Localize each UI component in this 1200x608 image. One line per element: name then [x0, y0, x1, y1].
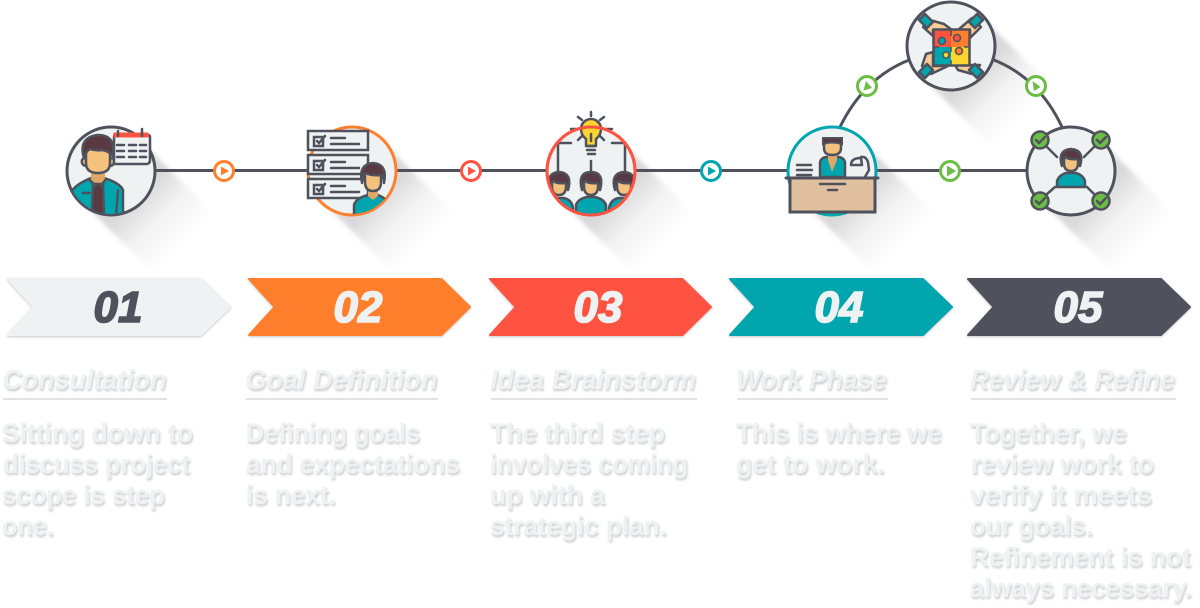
chevron 05: 05: [1054, 283, 1103, 332]
long shadows behind icons: [81, 16, 1171, 271]
text block: step 2: and expectations: [246, 449, 460, 479]
lightbulb: [571, 112, 612, 154]
text block: step 5: Refinement is not: [970, 542, 1191, 572]
heading: Idea Brainstorm: Idea Brainstorm: [490, 364, 696, 395]
heading: Review & Refine: Review & Refine: [970, 364, 1175, 395]
puzzle: [934, 30, 970, 66]
icon: goal checklist and person: [308, 127, 396, 216]
text block: step 4: [736, 418, 942, 479]
chevron 03: [490, 279, 711, 335]
text block: step 3: strategic plan.: [490, 511, 667, 541]
text block: step 3: involves coming: [490, 449, 688, 479]
text block: step 1: discuss project: [3, 449, 190, 479]
desk lamp: [851, 157, 869, 177]
icon: work phase desk: [786, 127, 878, 215]
chevron 05: [968, 279, 1190, 335]
text block: step 5: review work to: [971, 449, 1154, 479]
arrow: puzzle to step 5: [1026, 76, 1046, 96]
icon: puzzle hands: [907, 2, 995, 90]
person: [1057, 149, 1085, 187]
text block: step 3: up with a: [490, 480, 606, 510]
text block: step 1: scope is step: [2, 480, 165, 510]
icon: consultation person with calendar: [67, 127, 155, 216]
text block: step 2: [246, 418, 460, 510]
arrow: step 2 to 3: [462, 162, 480, 180]
arrow: step 1 to 2: [214, 162, 234, 180]
icon: review with checks: [1027, 127, 1115, 215]
desk: [786, 178, 878, 212]
icon: idea brainstorm team: [545, 112, 638, 216]
chevron 04: [730, 279, 952, 335]
text block: step 1: one.: [2, 511, 54, 541]
heading: Work Phase: Work Phase: [736, 364, 887, 395]
chevron 01: 01: [94, 283, 142, 332]
team members: [548, 170, 634, 214]
arrow: step 3 to 4: [702, 162, 720, 180]
text block: step 2: is next.: [246, 480, 336, 510]
text block: step 1: [2, 418, 193, 541]
text block: step 5: our goals.: [970, 511, 1093, 541]
check badges: [1032, 132, 1110, 210]
text block: step 3: The third step: [490, 418, 665, 448]
chevron 02: [249, 279, 470, 335]
hands: [919, 14, 983, 78]
heading: Consultation: Consultation: [2, 364, 166, 395]
chevron 01: [8, 279, 230, 335]
connector lines: [150, 60, 1062, 170]
text block: step 4: This is where we: [736, 418, 942, 448]
chevron 03: 03: [574, 283, 622, 332]
text block: step 1: Sitting down to: [2, 418, 193, 448]
text block: step 2: Defining goals: [246, 418, 420, 448]
heading: Goal Definition: Goal Definition: [246, 364, 438, 395]
arrow: step 4 to puzzle: [858, 76, 876, 96]
checklist cards: [308, 131, 368, 198]
text block: step 5: verify it meets: [970, 480, 1152, 510]
text block: step 5: always necessary.: [970, 573, 1192, 603]
arrow: step 4 to 5: [940, 162, 960, 180]
text block: step 4: get to work.: [736, 449, 885, 479]
chevron 02: 02: [334, 283, 383, 332]
text block: step 3: [490, 418, 688, 541]
text block: step 5: [970, 418, 1192, 603]
text block: step 5: Together, we: [970, 418, 1127, 448]
chevron 04: 04: [815, 283, 863, 332]
worker: [820, 138, 845, 177]
